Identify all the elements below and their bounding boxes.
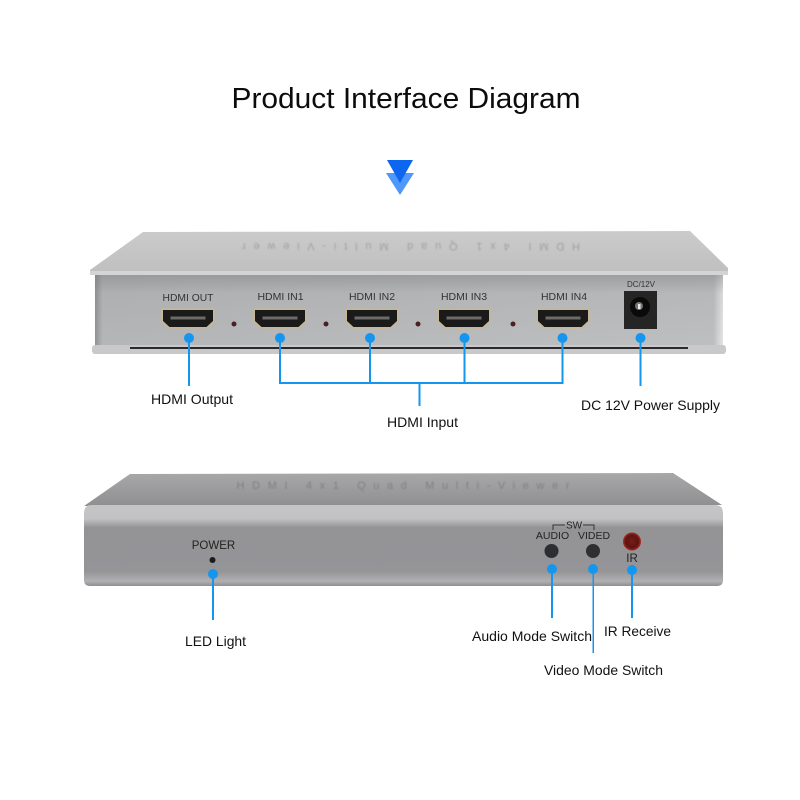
- port label: DC/12V: DC/12V: [627, 280, 656, 289]
- port label: HDMI IN2: HDMI IN2: [349, 291, 395, 303]
- label: LED Light: LED Light: [185, 633, 246, 649]
- sensor: IR receiver: [623, 532, 641, 550]
- connector: Video Mode Switch: [588, 564, 598, 653]
- port: HDMI IN2: [346, 308, 398, 328]
- port label: HDMI OUT: HDMI OUT: [163, 293, 214, 304]
- connector: HDMI Output: [184, 333, 194, 386]
- connector: IR Receive: [627, 565, 637, 618]
- top face of front device: [84, 473, 722, 506]
- device label: IR: IR: [626, 553, 638, 565]
- front face of rear device: [95, 275, 723, 348]
- port: DC power jack: [624, 291, 657, 329]
- device label: VIDED: VIDED: [578, 530, 610, 542]
- port: HDMI IN4: [536, 308, 590, 328]
- top face of rear device: [90, 231, 728, 275]
- port: HDMI IN3: [438, 308, 490, 328]
- port: HDMI IN1: [254, 308, 306, 328]
- connectors: front device callouts: [208, 564, 637, 653]
- button: audio: [544, 544, 558, 558]
- port label: HDMI IN3: HDMI IN3: [441, 291, 487, 303]
- connectors: rear device callouts: [184, 333, 646, 406]
- label: HDMI Input: HDMI Input: [387, 414, 458, 430]
- device label: POWER: POWER: [192, 540, 235, 552]
- indicator: power LED: [210, 557, 216, 563]
- label: Video Mode Switch: Video Mode Switch: [544, 662, 663, 678]
- panel: front view device: [84, 473, 723, 586]
- label: IR Receive: IR Receive: [604, 623, 671, 639]
- front face of front device: [84, 505, 723, 586]
- button: video: [586, 544, 600, 558]
- device label: AUDIO: AUDIO: [536, 530, 569, 542]
- connector: Audio Mode Switch: [547, 564, 557, 618]
- top face of rear device: HDMI 4x1 Quad Multi-Viewer: [242, 240, 580, 252]
- indicator LEDs: [232, 322, 516, 326]
- panel: rear view device: [90, 231, 728, 354]
- top face of front device: HDMI 4x1 Quad Multi-Viewer: [236, 480, 570, 492]
- connector: LED Light: [208, 569, 218, 620]
- connector: DC power: [636, 333, 646, 386]
- label: HDMI Output: HDMI Output: [151, 391, 233, 407]
- port label: HDMI IN4: HDMI IN4: [541, 291, 587, 303]
- port: HDMI OUT: [162, 308, 214, 328]
- port label: HDMI IN1: HDMI IN1: [257, 291, 304, 303]
- label: Audio Mode Switch: Audio Mode Switch: [472, 628, 592, 644]
- device label: SW bracket: SW: [566, 520, 583, 532]
- icon: double down arrow: [386, 160, 414, 195]
- label: DC 12V Power Supply: DC 12V Power Supply: [581, 397, 720, 413]
- title: Product Interface Diagram: [232, 83, 580, 115]
- device label: SW bracket: [553, 520, 594, 532]
- connector: HDMI Input bracket: [275, 333, 568, 406]
